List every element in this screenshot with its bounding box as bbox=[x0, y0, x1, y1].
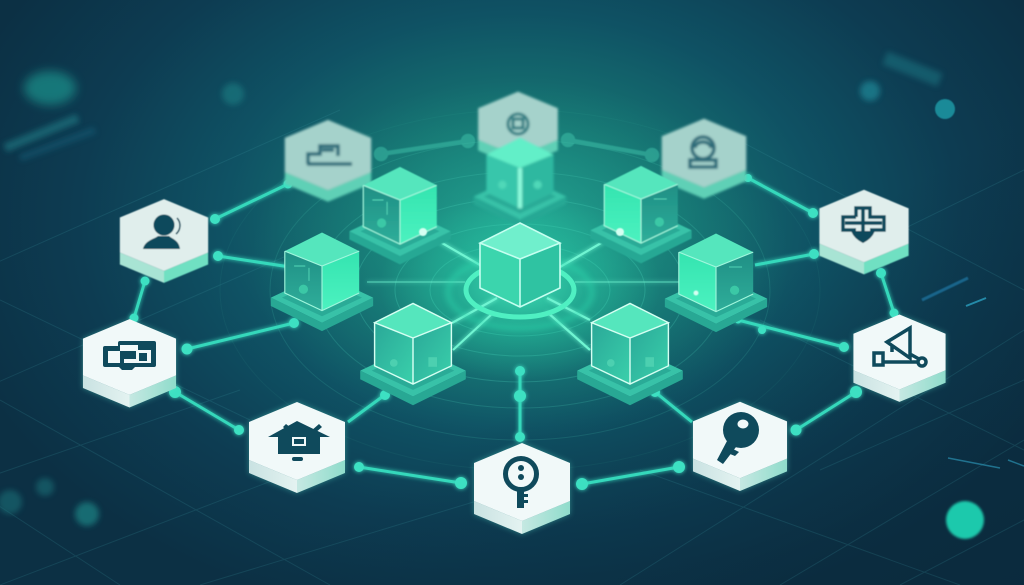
central glow bbox=[380, 190, 660, 380]
glow points bbox=[419, 228, 698, 296]
hexagon: top centre bbox=[478, 92, 558, 167]
hexagon: flag icon bbox=[853, 315, 946, 402]
central ring bbox=[448, 256, 592, 328]
connector lines: faded rear bbox=[376, 135, 657, 160]
hexagon: house icon bbox=[249, 402, 345, 493]
cube: central bbox=[480, 223, 560, 307]
wide glow bbox=[250, 80, 790, 440]
icon: keyhole key bbox=[506, 458, 536, 508]
cube: right bbox=[665, 234, 767, 332]
cube: upper left bbox=[349, 167, 451, 264]
cube: upper right bbox=[590, 166, 692, 263]
cube: left bbox=[271, 233, 373, 331]
cube: lower right bbox=[577, 303, 683, 405]
connector lines: outer ring bbox=[130, 174, 898, 490]
hexagon: top right bbox=[662, 119, 746, 199]
inner connector lines bbox=[367, 205, 680, 350]
icon: diagonal key bbox=[717, 412, 759, 464]
hexagon: round key icon bbox=[474, 443, 570, 534]
cube: lower left bbox=[360, 303, 466, 405]
hexagon: person icon bbox=[120, 199, 208, 283]
hexagon: top left bbox=[285, 120, 371, 202]
icon: house bbox=[268, 421, 330, 461]
icon: person with headset bbox=[143, 214, 180, 249]
hexagon: plus icon bbox=[819, 190, 909, 274]
icon: flag and device bbox=[874, 328, 926, 366]
icon: plus shield bbox=[843, 208, 884, 241]
cube: rear centre bbox=[474, 138, 566, 227]
icon: overlapping screens bbox=[103, 341, 156, 370]
concentric rings bbox=[220, 110, 820, 470]
hexagon: devices icon bbox=[83, 319, 176, 407]
hexagon: key icon bbox=[693, 402, 787, 491]
